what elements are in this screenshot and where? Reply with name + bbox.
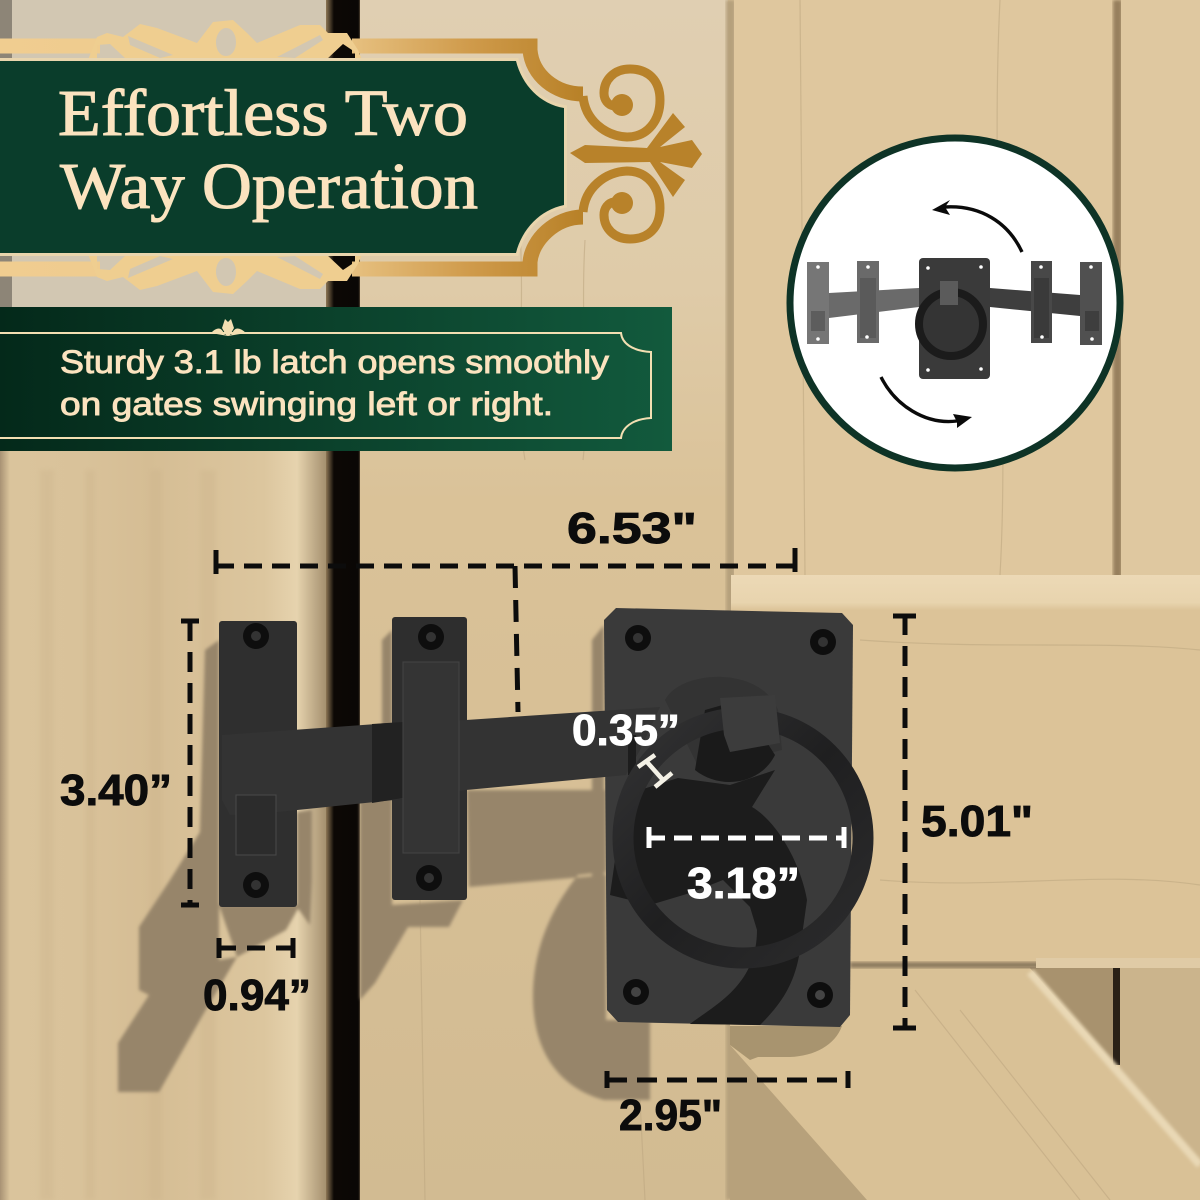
dimension: 3.40 inch: [60, 621, 199, 905]
keeper plate middle: [392, 617, 467, 900]
horizontal rail: [731, 575, 1200, 967]
diagonal brace: [730, 965, 1200, 1200]
latch cast shadows: [118, 625, 650, 1100]
inset circle: two way rotation: [790, 138, 1120, 468]
ring back plate: [604, 608, 853, 1027]
bottom ornament: [88, 254, 362, 294]
dimension: 2.95 inch: 2.95": [619, 1091, 722, 1140]
gate latch: [219, 608, 863, 1027]
dimension: 0.94 inch: 0.94”: [203, 971, 311, 1020]
dimension: 0.35 inch ring thickness: 0.35”: [572, 706, 680, 755]
inset latch product: [807, 258, 1102, 379]
catch slot: [236, 795, 276, 855]
ornament: small flower: [211, 319, 246, 336]
dimension: 3.18 inch ring inner: 3.18”: [687, 859, 800, 908]
dimension: 5.01 inch: 5.01": [921, 797, 1033, 846]
gold ornamental frame: [0, 20, 702, 294]
description text: [60, 344, 609, 422]
dimension: 6.53 inch: 6.53": [567, 504, 697, 553]
title text: [58, 77, 478, 223]
description text: Sturdy 3.1 lb latch opens smoothly: [60, 344, 609, 380]
description text: on gates swinging left or right.: [60, 386, 553, 422]
description panel: [0, 307, 672, 451]
wood grain streaks on left plank: [40, 470, 216, 1200]
ring: [623, 718, 863, 958]
dimension: 6.53 inch: [216, 504, 795, 712]
dimension: 5.01 inch: [893, 615, 1033, 1028]
ring knuckle: [720, 695, 780, 752]
dimension: 0.35 inch ring thickness: [572, 706, 680, 787]
dimension: 0.94 inch: [203, 938, 311, 1020]
title banner: [0, 61, 564, 253]
plate shadow on brace: [730, 1026, 842, 1060]
top ornament: [88, 20, 362, 60]
latch bar: [222, 707, 660, 815]
title text: Way Operation: [60, 150, 478, 223]
keeper bracket: [403, 662, 459, 853]
title text: Effortless Two: [58, 77, 468, 150]
lower background behind brace: [730, 965, 1030, 1200]
dimension: 2.95 inch: [607, 1071, 848, 1140]
arrows: [881, 207, 1022, 422]
dimension: 3.18 inch ring inner: [647, 827, 846, 908]
dimension: 3.40 inch: 3.40”: [60, 766, 172, 815]
keeper plate left: [219, 621, 297, 907]
